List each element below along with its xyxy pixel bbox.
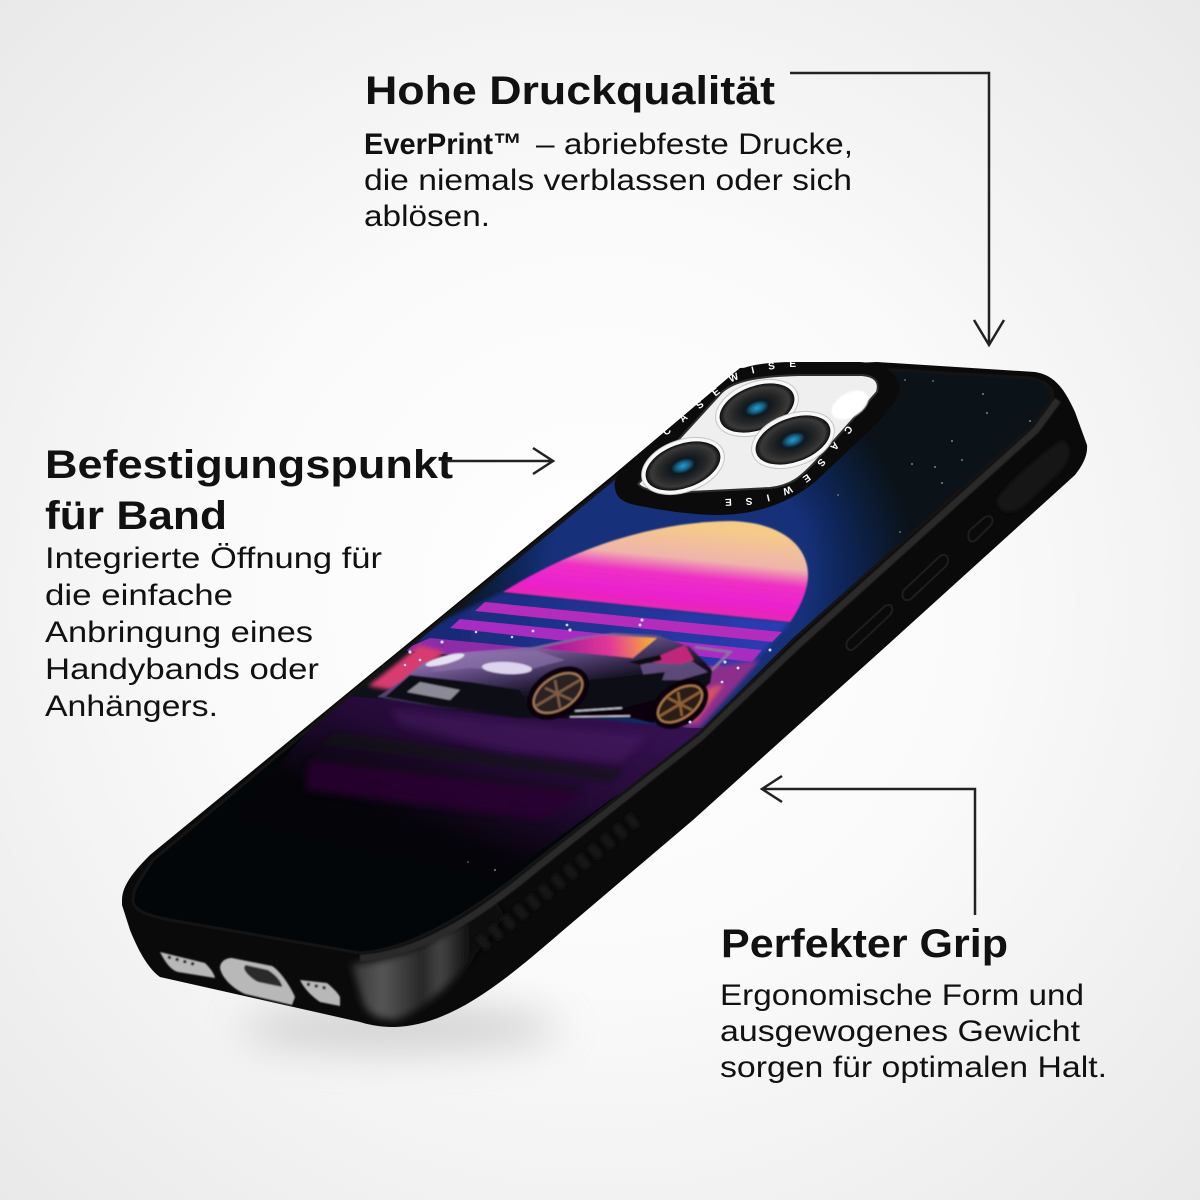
body text (720, 979, 1107, 1084)
camera brand text top: CASEWISE (664, 362, 796, 434)
body text (364, 128, 853, 233)
lens 1 (708, 369, 806, 447)
mirror (628, 655, 662, 665)
case body (122, 362, 1087, 1027)
body text: die einfache (45, 579, 233, 612)
sun (503, 521, 808, 622)
body text: ablösen. (364, 200, 490, 233)
callout: strap attachment (45, 443, 453, 723)
sun stripes (406, 602, 782, 670)
port: right speaker (300, 980, 340, 1006)
body text: Handybands oder (45, 653, 319, 686)
reflected car (390, 708, 650, 762)
rear wheel (654, 679, 710, 730)
screen artwork (284, 372, 1051, 871)
car (377, 633, 730, 739)
heading (45, 443, 453, 538)
heading: Hohe Druckqualität (365, 69, 775, 113)
headlight (482, 661, 532, 675)
side window (645, 645, 694, 664)
car body (377, 633, 712, 723)
camera plate (638, 375, 878, 492)
reflection stripes (305, 732, 625, 820)
body text: sorgen für optimalen Halt. (720, 1051, 1107, 1084)
lens 2 (744, 401, 842, 479)
body text: – abriebfeste Drucke, (536, 128, 853, 161)
phone case (122, 362, 1088, 1027)
lens 3 (634, 427, 732, 505)
camera brand text bottom: CASEWISE (725, 426, 852, 506)
stars (467, 379, 1031, 871)
arrow: grip (762, 776, 975, 915)
port: charging (220, 958, 295, 1005)
side buttons (846, 516, 992, 650)
port: left speaker (160, 952, 215, 978)
callout: print quality (364, 69, 853, 233)
body text (45, 542, 382, 723)
dark lower area (134, 734, 619, 952)
camera surround (615, 362, 899, 515)
body text: die niemals verblassen oder sich (364, 164, 852, 197)
heading: Perfekter Grip (721, 922, 1008, 966)
grille (407, 682, 460, 700)
side grip texture (480, 815, 640, 945)
blue glow (458, 440, 902, 728)
callout: grip (720, 922, 1107, 1084)
reflection floor (284, 696, 703, 854)
front bumper (385, 675, 530, 712)
screen rim (133, 370, 1053, 953)
side rim highlight (360, 400, 1058, 958)
sparkles (404, 618, 772, 724)
hood reflection (430, 650, 565, 672)
front wheel (526, 666, 590, 720)
arrow: strap attachment (445, 448, 553, 474)
blue stripe band (400, 592, 790, 672)
pink glow left (368, 645, 445, 692)
side panel (575, 672, 665, 708)
body text: Ergonomische Form und (720, 979, 1084, 1012)
arrow: print quality (790, 73, 1004, 345)
body text: EverPrint™ (364, 128, 522, 161)
flash (827, 385, 873, 425)
hood highlight (424, 652, 466, 668)
heading: Befestigungspunkt (45, 443, 453, 487)
pink glow right (668, 660, 760, 728)
windscreen (540, 635, 657, 658)
heading: für Band (45, 494, 227, 538)
rear spoiler (695, 647, 730, 670)
side skirt lines (570, 708, 630, 717)
body text: Anbringung eines (45, 616, 313, 649)
bottom corner highlight (352, 900, 505, 1020)
phone shadow (240, 1004, 560, 1052)
dark sky (352, 372, 1051, 700)
door reflection (640, 660, 708, 680)
body text: ausgewogenes Gewicht (720, 1015, 1081, 1048)
strap attachment (996, 440, 1069, 512)
body text: Anhängers. (45, 690, 218, 723)
body text: Integrierte Öffnung für (45, 542, 382, 575)
